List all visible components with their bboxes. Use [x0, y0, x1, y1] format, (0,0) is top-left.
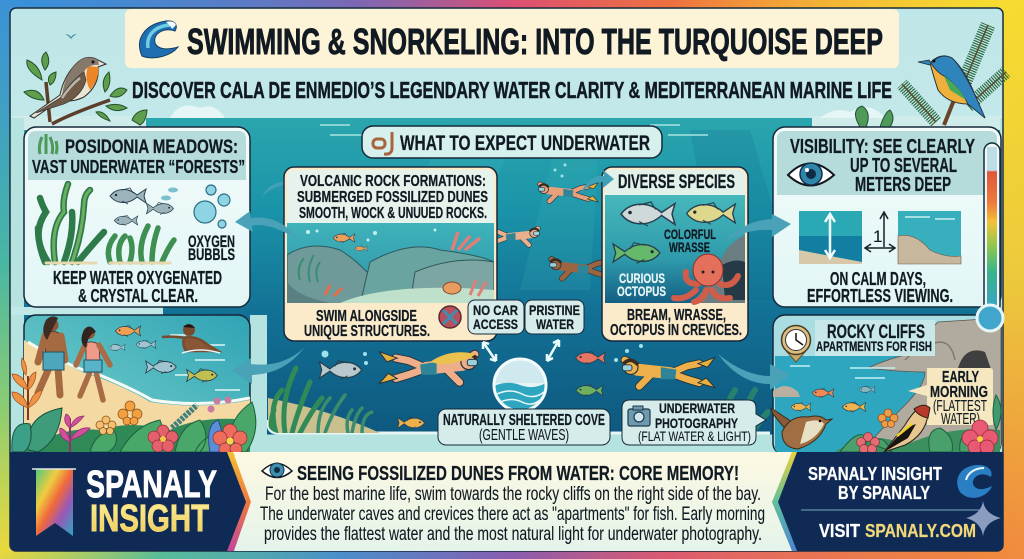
icon: clock pin: [782, 326, 810, 362]
footer: tip panel: [233, 452, 792, 551]
icon: rainbow flag: [32, 468, 76, 536]
arrow: double right: [547, 340, 559, 361]
footer: right branding: BY SPANALY: [838, 482, 931, 503]
panel: diverse species: OCTOPUS IN CREVICES.: [610, 322, 742, 339]
label: no car access: NO CAR: [473, 302, 518, 318]
arrow: volcanic to posidonia: [235, 211, 300, 241]
callout: early morning: (FLATTEST: [933, 398, 987, 415]
arrow: species to visibility: [724, 214, 791, 242]
label: what to expect: [362, 126, 662, 158]
footer: tip panel: SEEING FOSSILIZED DUNES FROM WATER: CORE MEMORY!: [297, 463, 739, 485]
icon: bluebird on pine: [855, 25, 1006, 127]
callout: early morning: MORNING: [930, 384, 988, 401]
illustration: fish: [110, 188, 178, 226]
thermometer: [977, 143, 1003, 331]
callout: early morning: WATER): [941, 411, 980, 428]
icon: wren: [771, 408, 832, 449]
label: what to expect: WHAT TO EXPECT UNDERWATER: [400, 132, 650, 155]
label: naturally sheltered cove: NATURALLY SHELTERED COVE: [443, 412, 605, 429]
footer: tip panel: The underwater caves and crevices there act as "apartments" for fish. Early morning: [260, 504, 765, 525]
figure: snorkeler yellow fins: [622, 358, 715, 388]
panel: diverse species: WRASSE: [669, 239, 710, 255]
panel: Posidonia meadows: POSIDONIA MEADOWS:: [65, 137, 238, 158]
header band: [28, 131, 246, 180]
icon: seagrass small: [39, 134, 57, 154]
callout: early morning: EARLY: [942, 369, 979, 386]
arrow: center to rocky cliffs: [718, 354, 790, 390]
label: underwater photography: UNDERWATER: [659, 400, 735, 416]
footer: tip panel: provides the flattest water and the most natural light for underwater photography.: [264, 524, 762, 545]
illustration: right foliage and birds: [771, 395, 1001, 454]
icon: gull: [65, 34, 77, 39]
panel: Posidonia meadows: BUBBLS: [188, 245, 235, 264]
arrow: center to beach: [232, 348, 304, 384]
illustration: seagrass and sand: [268, 368, 768, 433]
panel: volcanic rock formations: UNIQUE STRUCTURES.: [304, 323, 430, 340]
panel: volcanic rock formations: VOLCANIC ROCK FORMATIONS:: [300, 173, 486, 190]
panel: visibility: [773, 127, 1001, 307]
arrow: swimmer to species: [580, 170, 614, 194]
footer: left logo: SPANALY: [86, 464, 217, 506]
diagram: scale arrows: [865, 212, 895, 252]
footer: right branding: SPANALY.COM: [865, 521, 976, 541]
panel: underwater scene decoration: [268, 164, 768, 433]
icon: oxygen bubbles: [194, 185, 230, 228]
illustration: wrasse: [613, 243, 660, 263]
panel: volcanic rock formations: SUBMERGED FOSSILIZED DUNES: [297, 189, 488, 206]
label: pristine water: [525, 300, 584, 334]
footer: tip panel: For the best marine life, swim towards the rocky cliffs on the right side of the bay.: [265, 484, 761, 505]
icon: robin on branch: [24, 52, 147, 125]
icon: prohibited car: [439, 306, 461, 328]
panel: visibility: ON CALM DAYS,: [830, 269, 926, 289]
panel: diverse species: BREAM, WRASSE,: [627, 307, 726, 324]
diagram: scale arrows: 1: [873, 227, 882, 246]
label: underwater photography: [622, 400, 766, 445]
diagram: clear water: [898, 211, 961, 264]
label: underwater photography: PHOTOGRAPHY: [655, 415, 738, 431]
callout: early morning: [908, 368, 993, 428]
panel: rocky cliffs: [772, 315, 1001, 460]
label: pristine water: WATER: [536, 316, 574, 332]
panel: visibility: METERS DEEP: [855, 174, 951, 196]
panel: Posidonia meadows: & CRYSTAL CLEAR.: [78, 286, 198, 306]
panel: volcanic rock formations: SWIM ALONGSIDE: [316, 308, 417, 325]
figure: top swimmer: [539, 183, 598, 202]
icon: wave logo: [957, 465, 992, 498]
label: pristine water: PRISTINE: [529, 302, 580, 318]
icon: cove circle: [494, 359, 546, 412]
panel: diverse species: [602, 167, 748, 341]
illustration: left foliage and flowers: [12, 358, 256, 455]
panel: visibility: UP TO SEVERAL: [850, 155, 957, 177]
bubbles: [322, 164, 643, 365]
icon: eye: [788, 163, 834, 186]
illustration: bream: [621, 202, 675, 226]
arrow: double left: [483, 342, 496, 361]
panel: volcanic rock formations: [284, 167, 497, 341]
panel: diverse species: DIVERSE SPECIES: [618, 172, 735, 193]
figure: swimmer: [162, 324, 220, 353]
figure: snorkeler blonde: [379, 352, 477, 384]
label: no car access: ACCESS: [473, 316, 518, 332]
panel: visibility: EFFORTLESS VIEWING.: [807, 286, 953, 306]
icon: sparkle: [966, 501, 1001, 536]
label: naturally sheltered cove: (GENTLE WAVES): [479, 427, 569, 444]
panel: diverse species: COLORFUL: [664, 226, 716, 242]
figure: man walking: [38, 316, 65, 395]
panel: rocky cliffs: APARTMENTS FOR FISH: [816, 338, 932, 354]
icon: camera: [628, 406, 650, 426]
figure: woman walking: [76, 326, 110, 400]
illustration: seagrass: [38, 184, 174, 263]
label: underwater photography: (FLAT WATER & LIGHT): [638, 428, 751, 444]
footer: right branding: VISIT: [819, 521, 860, 541]
figure: second swimmer: [482, 227, 540, 246]
icon: eye small: [262, 463, 292, 478]
label: naturally sheltered cove: [438, 409, 610, 445]
icon: wave: [139, 21, 178, 58]
label: no car access: [468, 300, 524, 334]
footer: right branding: SPANALY INSIGHT: [808, 463, 943, 484]
footer: right branding: [772, 452, 1003, 551]
panel: Posidonia meadows: OXYGEN: [188, 232, 235, 251]
panel: Posidonia meadows: VAST UNDERWATER “FORESTS”: [32, 157, 245, 177]
illustration: yellow fish: [687, 203, 735, 224]
illustration: rocks underwater: [287, 223, 494, 305]
panel: Posidonia meadows: [24, 127, 250, 307]
panel: volcanic rock formations: SMOOTH, WOCK & UNUUED ROCKS.: [299, 205, 487, 222]
panel: diverse species: OCTOPUS: [617, 283, 666, 299]
panel: diverse species: CURIOUS: [619, 270, 665, 286]
figure: third swimmer: [550, 258, 617, 279]
illustration: octopus: [674, 254, 738, 302]
icon: snorkel mask: [373, 132, 392, 154]
title banner: [125, 9, 899, 68]
footer: left logo: INSIGHT: [90, 498, 209, 540]
panel: Posidonia meadows: KEEP WATER OXYGENATED: [53, 268, 222, 288]
footer: left logo: [10, 452, 251, 551]
arrow: small to volcanic: [262, 174, 298, 197]
illustration: fish: [319, 361, 362, 379]
panel: rocky cliffs: ROCKY CLIFFS: [827, 322, 925, 343]
panel: beach scene: [24, 315, 250, 460]
icon: goldfinch: [884, 405, 930, 452]
diagram: deep water: [799, 211, 862, 264]
